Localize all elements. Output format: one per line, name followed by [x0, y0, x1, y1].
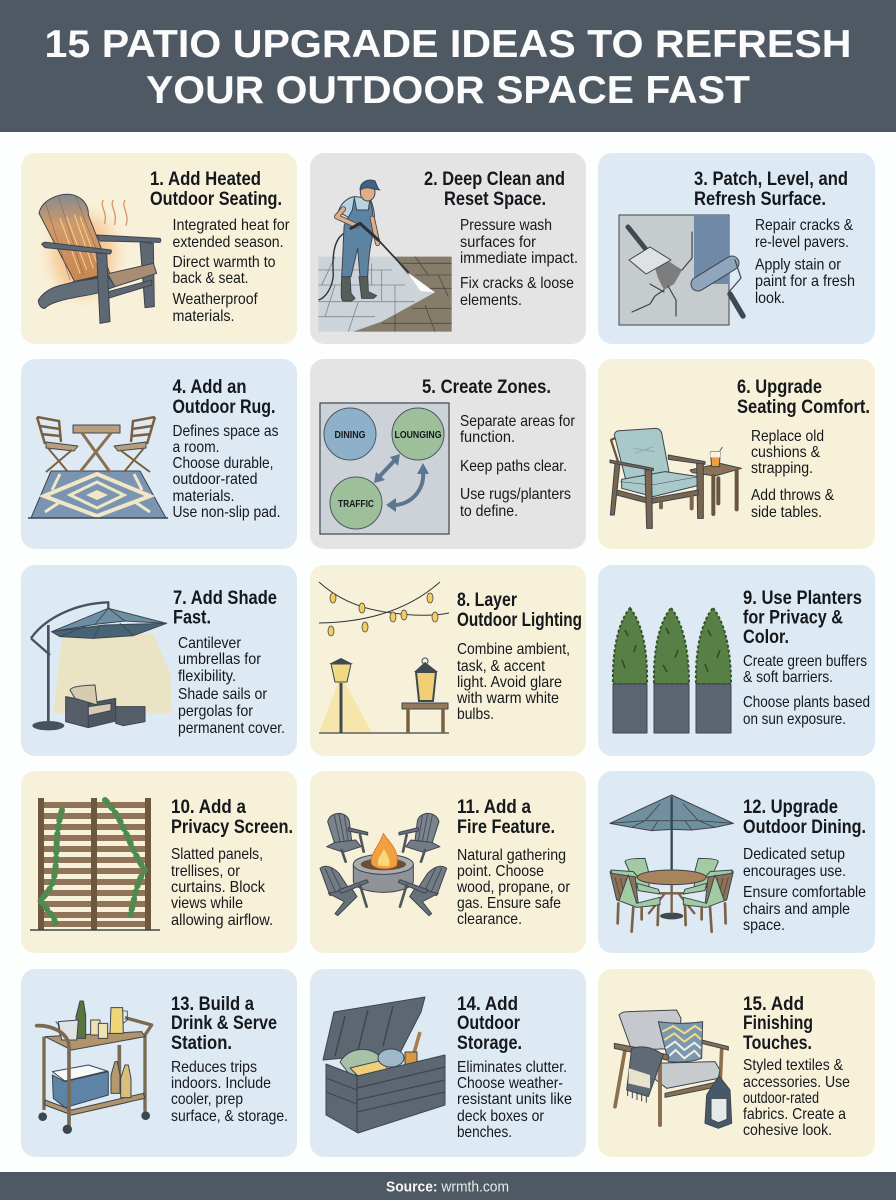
text block: outdoor-rated [172, 471, 258, 488]
text block: allowing airflow. [171, 912, 273, 929]
text block [743, 653, 870, 728]
panel: 15 finishing touches [598, 969, 875, 1157]
heading: 9. Use Planters [743, 587, 862, 609]
text block: Apply stain or [755, 256, 842, 274]
title [44, 23, 852, 112]
heading [424, 168, 565, 210]
heading: 2. Deep Clean and [424, 168, 565, 190]
heading: Fire Feature. [457, 816, 555, 838]
heading: 3. Patch, Level, and [694, 168, 848, 190]
text block: Integrated heat for [172, 217, 290, 234]
text block: Use rugs/planters [460, 486, 571, 503]
text block: Choose durable, [172, 455, 274, 472]
text block: Shade sails or [178, 686, 268, 703]
text block: re-level pavers. [755, 234, 849, 251]
heading: Drink & Serve [171, 1012, 277, 1034]
text block: Direct warmth to [172, 254, 276, 271]
text block: cohesive look. [743, 1122, 832, 1139]
text block [457, 1059, 572, 1141]
heading: 14. Add [457, 993, 518, 1015]
text block [171, 1059, 288, 1125]
text block: clearance. [457, 911, 522, 928]
text block [755, 217, 855, 307]
heading [173, 587, 277, 628]
text block: trellises, or [171, 863, 241, 880]
heading [171, 993, 277, 1054]
heading: Storage. [457, 1032, 522, 1054]
text block: space. [743, 917, 785, 934]
text block: gas. Ensure safe [457, 895, 561, 912]
text block: deck boxes or [457, 1108, 545, 1125]
heading [743, 796, 866, 838]
heading: Outdoor Rug. [172, 396, 276, 418]
text block: materials. [172, 308, 234, 325]
text block: Use non-slip pad. [172, 504, 280, 521]
text block: Choose weather- [457, 1075, 563, 1092]
text block: back & seat. [172, 270, 248, 287]
icon: cantilever umbrella [31, 602, 172, 730]
text block: umbrellas for [178, 651, 262, 668]
text block: accessories. Use [743, 1074, 850, 1091]
text block [460, 413, 576, 520]
text block: cooler, prep [171, 1091, 243, 1108]
heading: 8. Layer [457, 589, 517, 611]
text block: pergolas for [178, 703, 254, 720]
text block: chairs and ample [743, 901, 850, 918]
text block [743, 1057, 850, 1139]
icon: trowel, crack and roller [619, 215, 743, 325]
panel: 13 drink station [21, 969, 297, 1157]
heading [743, 587, 862, 648]
heading: Outdoor Seating. [150, 188, 282, 210]
panel: 6 seating comfort [598, 359, 875, 549]
heading: 4. Add an [172, 376, 246, 398]
panel: 4 outdoor rug [21, 359, 297, 549]
text block: Separate areas for [460, 413, 576, 430]
diagram: zones: TRAFFIC [338, 499, 374, 510]
text block: fabrics. Create a [743, 1106, 846, 1123]
icon: rug with bistro set [28, 417, 168, 518]
heading: Finishing [743, 1012, 813, 1034]
text block: wood, propane, or [456, 879, 571, 896]
panel: 1 heated seating [21, 153, 297, 344]
text block: Natural gathering [457, 847, 566, 864]
heading [743, 993, 813, 1054]
text block: resistant units like [457, 1091, 572, 1108]
text block [456, 641, 570, 723]
icon: string lights and lanterns [319, 582, 449, 733]
heading [457, 993, 522, 1054]
text block [172, 423, 280, 521]
heading [150, 168, 282, 210]
text block: light. Avoid glare [457, 674, 562, 691]
heading: 10. Add a [171, 796, 246, 818]
icon: bar cart [37, 1001, 152, 1134]
heading [172, 376, 276, 418]
text block: Weatherproof [172, 291, 258, 308]
text block: a room. [172, 439, 220, 456]
heading: Refresh Surface. [694, 188, 826, 210]
text block: outdoor-rated [743, 1090, 819, 1107]
panel: 11 fire feature [310, 771, 586, 953]
text block: look. [755, 290, 785, 307]
heading: Outdoor [457, 1012, 520, 1034]
heading: 11. Add a [457, 796, 531, 818]
heading: 6. Upgrade [737, 376, 822, 398]
panel: 5 create zones [310, 359, 586, 549]
text block: views while [171, 895, 243, 912]
text block: surface, & storage. [171, 1108, 288, 1125]
text block: Replace old [751, 428, 824, 445]
text block [456, 847, 571, 928]
text block: Add throws & [751, 487, 834, 504]
text block: curtains. Block [171, 879, 266, 896]
text block: Pressure wash [460, 217, 552, 234]
panel: 2 deep clean [310, 153, 586, 344]
title: 15 PATIO UPGRADE IDEAS TO REFRESH [44, 23, 852, 66]
text block: on sun exposure. [743, 711, 846, 728]
panel: 7 add shade [21, 565, 297, 756]
icon: dining set with umbrella [610, 795, 733, 932]
text block [460, 217, 578, 309]
text block: task, & accent [457, 658, 545, 675]
heading [171, 796, 293, 838]
icon: pressure washing worker [318, 180, 452, 332]
panel: 12 outdoor dining [598, 771, 875, 953]
text block: side tables. [751, 504, 822, 521]
icon: three planters [613, 608, 731, 733]
text block [178, 635, 285, 737]
text block: Repair cracks & [755, 217, 853, 234]
text block: Keep paths clear. [460, 458, 567, 475]
text block: to define. [460, 503, 518, 520]
text block: encourages use. [743, 863, 846, 880]
text block: immediate impact. [460, 250, 578, 267]
heading: 12. Upgrade [743, 796, 838, 818]
title: YOUR OUTDOOR SPACE FAST [146, 69, 750, 112]
text block: point. Choose [457, 863, 544, 880]
text block: paint for a fresh [755, 273, 855, 290]
heading: for Privacy & [743, 606, 843, 628]
heading: 13. Build a [171, 993, 254, 1015]
heading: Touches. [743, 1032, 812, 1054]
heading: Color. [743, 626, 789, 648]
icon: fire pit with chairs [320, 813, 447, 916]
icon: cushioned chair and side table [610, 428, 742, 528]
text block: cushions & [751, 444, 820, 461]
heading: Station. [171, 1032, 232, 1054]
icon: heated chair [38, 194, 161, 323]
heading [457, 589, 582, 631]
heading: 5. Create Zones. [422, 376, 551, 398]
heading [737, 376, 870, 418]
text block: Cantilever [178, 635, 242, 652]
text block: surfaces for [460, 234, 537, 251]
text block [743, 846, 866, 934]
text block: Choose plants based [743, 694, 870, 711]
text block: function. [460, 429, 515, 446]
source credit: Source: wrmth.com [386, 1180, 509, 1196]
text block: Slatted panels, [171, 846, 263, 863]
text block: Styled textiles & [743, 1057, 843, 1074]
heading: Outdoor Dining. [743, 816, 866, 838]
text block: Defines space as [172, 423, 278, 440]
text block: extended season. [172, 234, 284, 251]
panel: 9 planters [598, 565, 875, 756]
text block: & soft barriers. [743, 669, 833, 686]
text block: benches. [457, 1124, 512, 1141]
text block: strapping. [751, 460, 813, 477]
panel: 3 patch and refresh [598, 153, 875, 344]
heading: Fast. [173, 606, 211, 628]
icon: styled chair with pillow and lantern [614, 1010, 732, 1128]
heading: 7. Add Shade [173, 587, 277, 609]
text block [172, 217, 290, 325]
diagram: zones [320, 403, 449, 534]
diagram: zones: LOUNGING [394, 430, 442, 441]
icon: slatted screen with vines [30, 798, 160, 930]
text block: bulbs. [457, 706, 494, 723]
heading [457, 796, 555, 838]
text block: Eliminates clutter. [457, 1059, 567, 1076]
text block: Dedicated setup [743, 846, 845, 863]
footer [0, 1172, 896, 1200]
heading: Privacy Screen. [171, 816, 293, 838]
text block: Create green buffers [743, 653, 867, 670]
heading: Reset Space. [444, 188, 546, 210]
heading: 15. Add [743, 993, 804, 1015]
text block: Fix cracks & loose [460, 275, 574, 292]
text block: elements. [460, 292, 522, 309]
heading: Outdoor Lighting [457, 609, 582, 631]
text block: materials. [172, 488, 234, 505]
text block: Ensure comfortable [743, 884, 866, 901]
icon: deck box [323, 997, 445, 1133]
text block: flexibility. [178, 668, 236, 685]
text block: Reduces trips [171, 1059, 257, 1076]
panel: 14 outdoor storage [310, 969, 586, 1157]
heading [694, 168, 848, 210]
panel: 8 outdoor lighting [310, 565, 586, 756]
header banner [0, 0, 896, 132]
heading: Seating Comfort. [737, 396, 870, 418]
text block [171, 846, 273, 929]
text block: with warm white [456, 690, 559, 707]
diagram: zones: DINING [334, 430, 366, 441]
text block: indoors. Include [171, 1075, 271, 1092]
text block: permanent cover. [178, 720, 285, 737]
heading: 1. Add Heated [150, 168, 261, 190]
panel: 10 privacy screen [21, 771, 297, 953]
text block: Combine ambient, [457, 641, 570, 658]
text block [751, 428, 834, 521]
